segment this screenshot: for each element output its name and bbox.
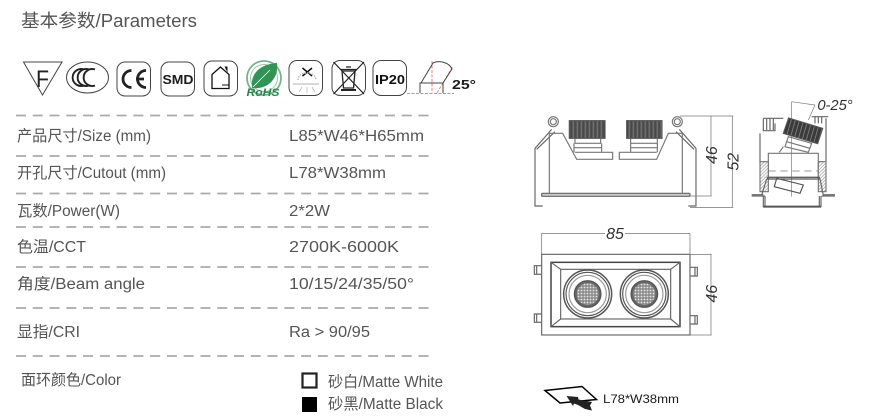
right lens: [620, 270, 668, 318]
row: CRI: [17, 323, 370, 341]
row: CCT: 色温/CCT: [17, 238, 87, 256]
row: cutout: [17, 164, 386, 182]
row: size: L85*W46*H65mm: [289, 128, 424, 145]
row: CRI: 显指/CRI: [17, 323, 80, 341]
row: power: 瓦数/Power(W): [17, 202, 120, 220]
trim cone and flange: [752, 179, 835, 207]
row: power: 2*2W: [289, 203, 330, 220]
dimensions 46 and 52: 46: [704, 146, 721, 164]
icon: SMD mark: SMD: [162, 73, 194, 87]
diagram: front elevation: [535, 116, 742, 207]
row: CRI: Ra > 90/95: [289, 324, 370, 341]
icon: 25 degree tilt: [407, 61, 476, 94]
row: size: [17, 127, 424, 145]
row: size: 产品尺寸/Size (mm): [17, 127, 151, 145]
icon: IP20 rating: IP20: [375, 72, 405, 87]
swatch: matte white: 砂白/Matte White: [328, 373, 443, 391]
dimension 46: 46: [704, 285, 721, 303]
row: CCT: 2700K-6000K: [289, 239, 400, 256]
parameters table: [16, 116, 443, 413]
trim frame: [542, 254, 690, 335]
row: color: [21, 371, 443, 413]
diagram: plan view: [534, 226, 721, 335]
top bracket: [760, 117, 828, 162]
dimension 85: 85: [606, 226, 624, 243]
cutout size label: L78*W38mm: [603, 392, 679, 406]
title: 基本参数/Parameters: [21, 11, 197, 31]
icon: RoHS leaf: [246, 61, 281, 99]
icon: indoor home: [204, 61, 238, 96]
icon: cutout hole with arrow: [545, 386, 596, 410]
row: CCT: [17, 238, 400, 256]
icon: no cover insulation: [289, 60, 322, 96]
row: power: [17, 202, 330, 220]
icon: no bin disposal: [332, 60, 366, 96]
icon: CCC mark: [66, 62, 108, 93]
swatch: matte black: 砂黑/Matte Black: [328, 395, 443, 413]
diagram: side section with tilt: [752, 97, 853, 207]
icon: F mark: F: [36, 66, 49, 93]
lamp knobs: [569, 121, 662, 152]
icon: 25 degree tilt: 25°: [452, 77, 476, 92]
row: color: 面环颜色/Color: [21, 371, 121, 389]
row: beam angle: [17, 275, 414, 293]
icon: IP20 rating: [373, 60, 406, 96]
row: cutout: 开孔尺寸/Cutout (mm): [17, 164, 166, 182]
certification icon row: [24, 60, 476, 99]
icon: CE mark: [117, 62, 150, 96]
lamp body: [760, 153, 826, 193]
row: cutout: L78*W38mm: [289, 165, 386, 182]
left lens: [564, 270, 612, 318]
row: beam angle: 角度/Beam angle: [17, 275, 145, 293]
icon: F mark: [24, 62, 62, 95]
icon: SMD mark: [161, 62, 194, 96]
spring clips: [535, 117, 696, 206]
dimensions 46 and 52: 52: [725, 153, 742, 171]
dimension 85: [542, 226, 690, 254]
mounting clips: [534, 266, 697, 324]
icon: RoHS leaf: RoHS: [246, 87, 280, 99]
tilt angle label: 0-25°: [817, 97, 853, 114]
cutout callout: [545, 386, 679, 410]
dimension 46: [690, 254, 721, 335]
tilted lamp head: [779, 118, 823, 152]
row: beam angle: 10/15/24/35/50°: [289, 276, 414, 293]
dimensions 46 and 52: [680, 116, 742, 207]
housing body: [542, 133, 690, 196]
